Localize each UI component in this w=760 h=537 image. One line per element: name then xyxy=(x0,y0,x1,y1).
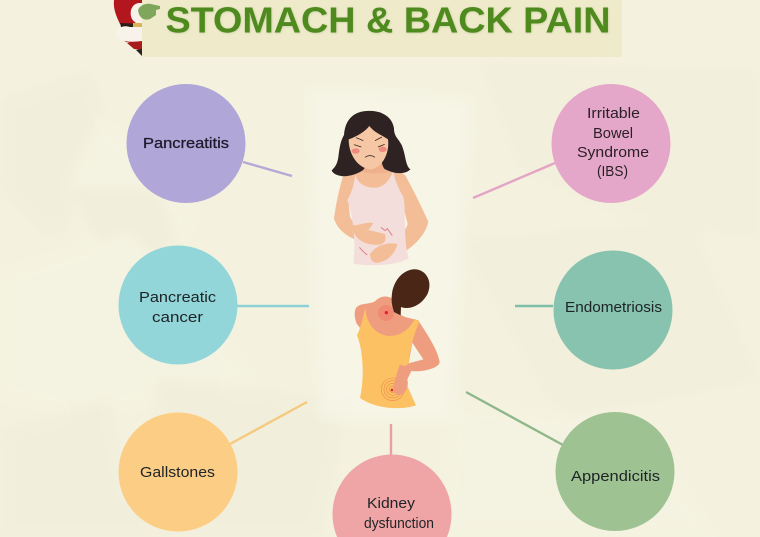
light area behind figures xyxy=(310,90,470,420)
title banner xyxy=(142,0,622,57)
pain rings xyxy=(381,378,404,401)
title: STOMACH & BACK PAIN xyxy=(166,0,610,40)
circle: Kidney dysfunction xyxy=(333,455,452,537)
yellow top xyxy=(357,307,419,408)
circle: Pancreatic cancer: Pancreatic xyxy=(139,289,217,306)
face xyxy=(349,126,388,169)
figure: woman holding stomach xyxy=(332,111,428,265)
circle: Pancreatic cancer: cancer xyxy=(152,309,203,326)
circle: Kidney dysfunction: Kidney xyxy=(367,495,416,512)
circle: Appendicitis: Appendicitis xyxy=(571,468,660,485)
top xyxy=(347,171,409,265)
skin: back and arm xyxy=(355,297,440,372)
figure: woman with back pain xyxy=(355,269,440,408)
circle: Irritable Bowel Syndrome: Bowel xyxy=(593,125,633,142)
circle: Gallstones: Gallstones xyxy=(140,464,215,481)
icon: santa body xyxy=(114,0,142,56)
hair xyxy=(392,269,429,315)
gap between arm and waist xyxy=(409,343,423,363)
neck xyxy=(362,160,388,174)
circle: Appendicitis xyxy=(556,412,674,531)
circle: Pancreatitis xyxy=(126,84,246,203)
circle: Irritable Bowel Syndrome: (IBS) xyxy=(597,163,628,180)
hands xyxy=(352,223,386,245)
forearm and hand xyxy=(393,365,412,395)
circle: Endometriosis xyxy=(554,250,672,370)
circle: Endometriosis: Endometriosis xyxy=(565,299,662,316)
circle: Irritable Bowel Syndrome xyxy=(552,84,670,203)
connector lines xyxy=(230,162,563,455)
circle: Irritable Bowel Syndrome: Irritable xyxy=(587,105,640,122)
circle: Pancreatic cancer xyxy=(118,246,238,364)
circle: Gallstones xyxy=(118,412,238,532)
circle: Kidney dysfunction: dysfunction xyxy=(364,515,434,532)
title: STOMACH & BACK PAIN xyxy=(166,0,611,41)
hair xyxy=(332,111,410,176)
icon: santa green glove xyxy=(138,4,160,20)
circle: Irritable Bowel Syndrome: Syndrome xyxy=(577,144,649,161)
circle: Pancreatitis: Pancreatitis xyxy=(143,135,229,152)
